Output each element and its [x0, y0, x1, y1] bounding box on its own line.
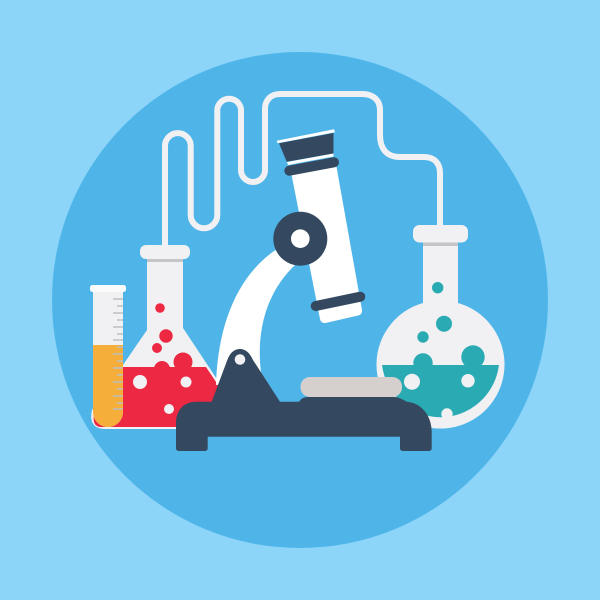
scale ticks — [113, 299, 123, 409]
red liquid — [94, 367, 240, 427]
tube glass — [93, 290, 123, 427]
microscope — [176, 129, 432, 451]
flask glass — [91, 258, 250, 429]
eyepiece — [279, 133, 334, 162]
eyepiece band — [287, 154, 334, 165]
conical flask — [91, 245, 250, 429]
base — [176, 349, 432, 451]
eyepiece rim — [277, 129, 335, 143]
round flask — [376, 225, 504, 429]
background circle — [52, 52, 548, 548]
arm — [216, 247, 296, 385]
teal liquid — [382, 365, 499, 417]
teal bubbles — [413, 282, 485, 373]
tube rim — [90, 285, 126, 292]
collar upper — [289, 162, 334, 171]
flask glass — [376, 245, 504, 429]
flask cap — [140, 245, 190, 259]
collar lower — [316, 297, 360, 306]
white bubbles — [404, 374, 475, 420]
knob centre — [291, 229, 310, 248]
red bubbles — [152, 303, 192, 377]
orange liquid — [93, 345, 123, 427]
flask neck shadow — [147, 258, 183, 262]
stage slide — [300, 377, 402, 397]
pivot hole — [235, 354, 245, 365]
glass tubing — [165, 94, 440, 250]
flask cap — [413, 225, 468, 242]
flask neck shadow — [423, 242, 458, 246]
test tube — [90, 285, 126, 427]
focus knob — [273, 212, 327, 266]
body tube — [291, 164, 362, 323]
white bubbles — [133, 375, 192, 414]
